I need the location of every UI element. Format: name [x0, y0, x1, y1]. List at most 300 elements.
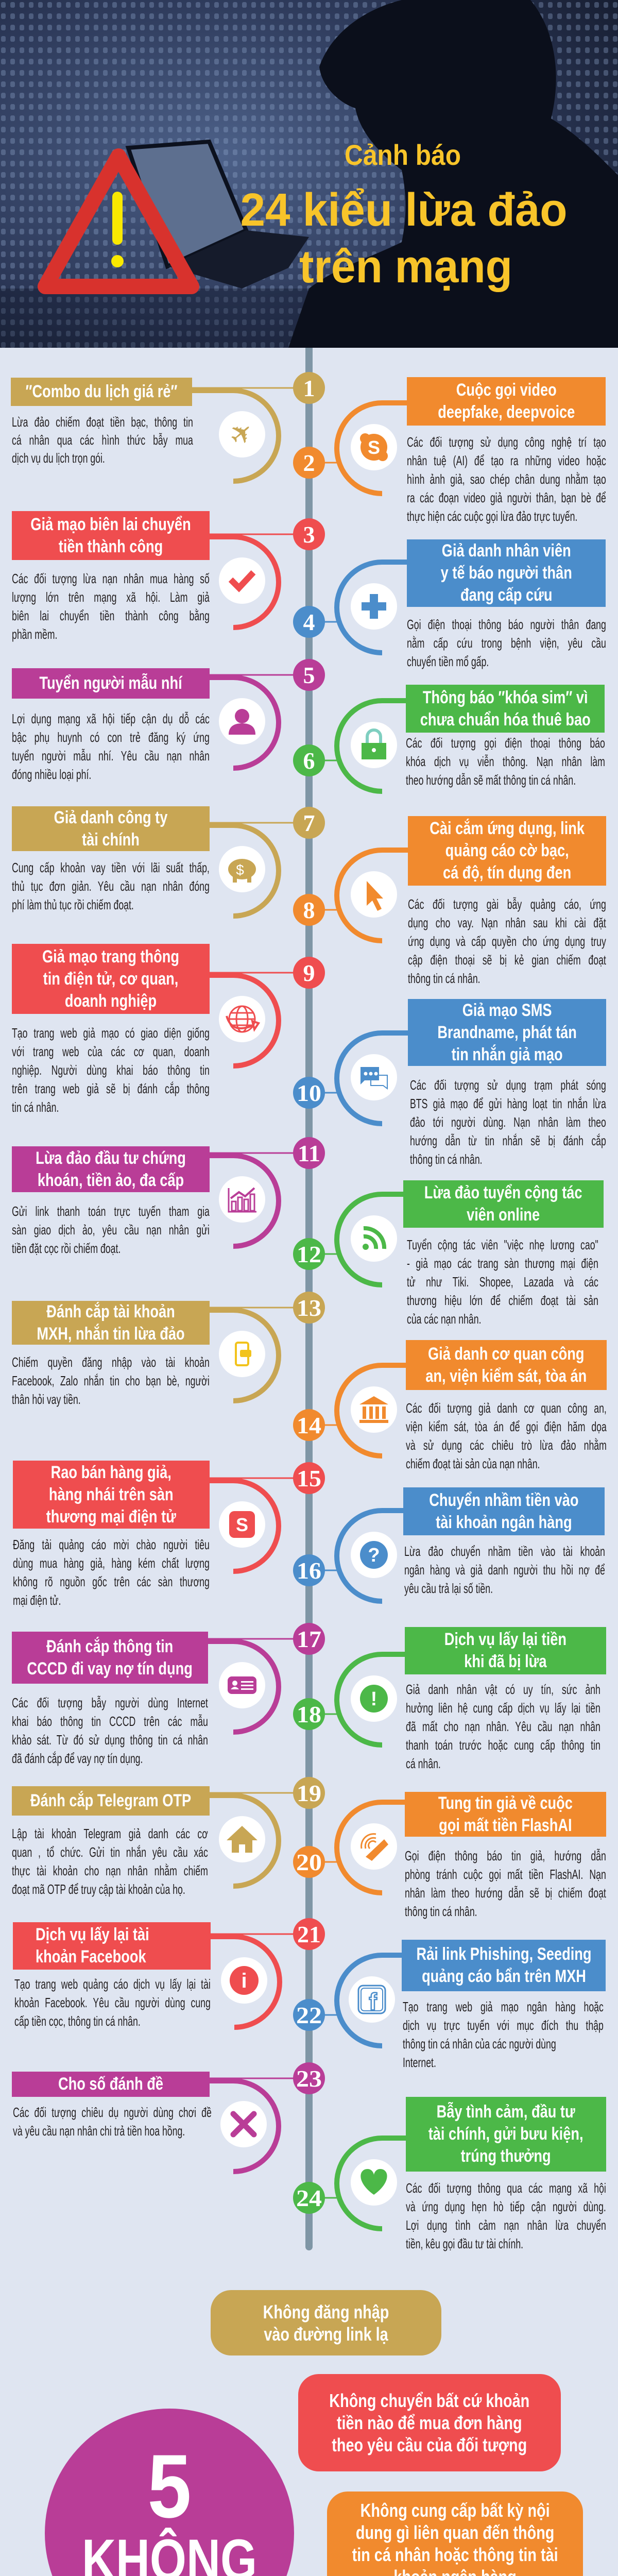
connector, icon and number — [293, 400, 407, 496]
number 14 — [293, 1409, 325, 1441]
title box — [407, 377, 606, 426]
rule 2 — [298, 2374, 561, 2471]
rule 3: tin cá nhân hoặc thông tin tài — [352, 2544, 558, 2565]
title box: Giả danh nhân viên — [442, 541, 571, 561]
title box — [408, 816, 606, 886]
description: đảo tới người dùng. Nạn nhân làm theo — [410, 1114, 606, 1130]
description: Các đối tượng lừa nạn nhân mua hàng số — [12, 571, 210, 586]
header: hacker image with title — [0, 0, 618, 348]
item 12 — [293, 1180, 604, 1327]
title box: doanh nghiệp — [65, 991, 157, 1011]
description — [408, 896, 606, 986]
item 10 — [293, 999, 606, 1167]
description — [407, 617, 606, 669]
description: phòng tránh cuộc gọi mất tiền FlashAI. Nạn — [405, 1867, 606, 1882]
description: Lợi dụng tình cảm nạn nhân lừa chuyển — [406, 2217, 606, 2233]
description — [13, 2103, 212, 2140]
title box: Lừa đảo đầu tư chứng — [36, 1148, 186, 1167]
title box — [405, 1792, 606, 1837]
description: Lập tài khoản Telegram giả danh các cơ — [12, 1826, 208, 1841]
title box: tin điện tử, cơ quan, — [43, 969, 178, 988]
rule 3: Không cung cấp bất kỳ nội — [360, 2500, 550, 2521]
title box: Cuộc gọi video — [456, 380, 556, 400]
title box: an, viện kiểm sát, tòa án — [426, 1366, 587, 1386]
description: trên trang web giả sẽ bị đánh cắp thông — [12, 1081, 210, 1096]
title box: MXH, nhắn tin lừa đảo — [37, 1324, 185, 1344]
icon: wifi — [351, 1215, 397, 1262]
icon: phone — [351, 1823, 397, 1870]
description — [14, 1975, 211, 2030]
description: bậc phụ huynh có con trẻ đăng ký ứng — [12, 730, 210, 745]
rule 1 — [211, 2290, 441, 2355]
title box: Lừa đảo tuyển cộng tác — [424, 1183, 582, 1202]
connector, icon and number — [309, 1792, 618, 1921]
description: Các đối tượng chiêu dụ người dùng chơi đề — [13, 2105, 212, 2120]
description: thông tin cá nhân. — [408, 971, 480, 986]
item 17 — [0, 1632, 309, 1768]
icon: piggy bank: $ — [236, 862, 244, 878]
item 5 — [12, 659, 325, 782]
number 23 — [293, 2062, 325, 2094]
description: yêu cầu trả lại số tiền. — [404, 1581, 493, 1596]
number 19 — [293, 1777, 325, 1809]
title box: đang cấp cứu — [460, 585, 552, 605]
item 20 — [309, 1792, 618, 1921]
number 2 — [293, 447, 325, 479]
connector, icon and number — [293, 1030, 408, 1126]
item 19 — [0, 1786, 309, 1899]
description: Các đối tượng sử dụng công nghệ trí tạo — [407, 434, 606, 450]
item 22 — [309, 1940, 618, 2072]
title box — [12, 1632, 208, 1684]
item 9 — [12, 944, 325, 1115]
item 7 — [12, 806, 325, 919]
description: Các đối tượng thông qua các mạng xã hội — [406, 2180, 606, 2196]
title box: Chuyển nhầm tiền vào — [429, 1490, 579, 1510]
description: Tạo trang web giả mạo ngân hàng hoặc — [403, 1999, 604, 2014]
number 1: 1 — [303, 375, 315, 401]
icon: facebook: f — [369, 1988, 377, 2015]
description — [12, 1693, 208, 1768]
description — [12, 711, 210, 782]
title box: Cho số đánh đề — [58, 2074, 163, 2094]
title box: quảng cáo bẩn trên MXH — [422, 1967, 586, 1986]
description: nằm cấp cứu trong bệnh viện, yêu cầu — [407, 635, 606, 651]
connector, icon and number — [210, 518, 325, 630]
title box: tài chính, gửi bưu kiện, — [428, 2124, 583, 2144]
connector, icon and number — [210, 659, 325, 771]
title box: Dịch vụ lấy lại tài — [36, 1925, 149, 1944]
icon: id card — [219, 1662, 265, 1708]
description — [12, 1824, 208, 1899]
title box — [406, 2097, 606, 2172]
number 7 — [293, 807, 325, 839]
description: đóng nhiều loại phí. — [12, 767, 91, 782]
description: Tuyển cộng tác viên "việc nhẹ lương cao" — [407, 1237, 598, 1252]
item 16 — [309, 1487, 618, 1603]
title box: Cài cắm ứng dụng, link — [430, 819, 585, 838]
description — [407, 434, 606, 524]
title box: Đánh cắp Telegram OTP — [30, 1791, 191, 1810]
rule 2: tiền nào để mua đơn hàng — [337, 2412, 522, 2433]
connector, icon and number — [293, 848, 408, 943]
number 10: 10 — [297, 1080, 321, 1106]
description — [406, 2179, 606, 2253]
title box: trúng thưởng — [461, 2146, 551, 2166]
item 13 — [12, 1292, 325, 1407]
number 9: 9 — [303, 960, 315, 986]
connector, icon and number — [293, 560, 407, 655]
description: quan , tổ chức. Gửi tin nhắn yêu cầu xác — [12, 1844, 208, 1860]
description: Lừa đảo chiếm đoạt tiền bạc, thông tin — [12, 414, 193, 430]
number 7: 7 — [303, 810, 315, 836]
title box: CCCD đi vay nợ tín dụng — [27, 1659, 193, 1679]
description: tiền, kêu gọi đầu tư tài chính. — [406, 2236, 523, 2251]
title box — [12, 944, 210, 1014]
number 3 — [293, 518, 325, 550]
connector, icon and number — [0, 1922, 330, 2030]
number 13 — [293, 1292, 325, 1324]
description: BTS giả mạo để gửi hàng loạt tin nhắn lừa — [410, 1096, 606, 1111]
title box — [13, 1461, 210, 1529]
description: của các nạn nhân. — [407, 1311, 481, 1327]
description: nhân làm theo hướng dẫn sẽ bị chiếm đoạt — [405, 1885, 606, 1901]
connector, icon and number — [210, 1292, 325, 1403]
description: ngân hàng và giả danh người thu hồi nợ để — [404, 1562, 605, 1578]
rule 3 — [327, 2492, 583, 2576]
description: với trang web của các cơ quan, doanh — [12, 1044, 210, 1059]
description: dịch vụ trực tuyến với mục đích thu thập — [403, 2018, 604, 2033]
description: Internet. — [403, 2055, 436, 2070]
title box: quảng cáo cờ bạc, — [445, 841, 569, 860]
title box: y tế báo người thân — [440, 563, 572, 583]
icon: exclamation: ! — [371, 1688, 377, 1710]
number 4: 4 — [303, 609, 315, 635]
number 24 — [293, 2182, 325, 2214]
description: cấp tiền cọc, thông tin cá nhân. — [14, 2013, 141, 2029]
number 17: 17 — [297, 1626, 321, 1652]
description: thương hiệu lớn để chiếm đoạt tài sản — [407, 1293, 598, 1308]
title box: hàng nhái trên sàn — [49, 1485, 174, 1504]
description: không rõ nguồn gốc trên các sàn thương — [13, 1574, 210, 1589]
connector, icon and number — [293, 698, 406, 794]
description: ứng dụng và cấp quyền cho ứng dụng truy — [408, 934, 606, 949]
title box: cá độ, tín dụng đen — [443, 863, 571, 883]
description: thân hỏi vay tiền. — [12, 1392, 81, 1407]
icon: info: i — [241, 1970, 247, 1992]
rule 1: Không đăng nhập — [263, 2301, 389, 2323]
number 4 — [293, 606, 325, 638]
description: hướng dẫn từ tin nhắn sẽ bị đánh cắp — [410, 1133, 606, 1148]
description: hình ảnh giả, sao chép chân dung nhằm tạo — [407, 471, 606, 487]
description: đã đánh cắp để vay nợ tín dụng. — [12, 1751, 143, 1766]
icon: person — [219, 698, 265, 744]
item 15 — [0, 1461, 309, 1610]
description: cá nhân. — [406, 1756, 441, 1771]
description: Tạo trang web giả mạo có giao diện giống — [12, 1025, 210, 1041]
rule 3: dung gì liên quan đến thông — [356, 2522, 554, 2543]
description: mại điện tử. — [13, 1592, 61, 1608]
number 6 — [293, 744, 325, 776]
description: thanh toán trước hoặc cung cấp thông tin — [406, 1737, 600, 1753]
title box: thương mại điện tử — [46, 1506, 176, 1526]
title box: Brandname, phát tán — [437, 1022, 577, 1042]
description: Lợi dụng mạng xã hội tiếp cận dụ dỗ các — [12, 711, 210, 726]
description: Chiếm quyền đăng nhập vào tài khoản — [12, 1354, 210, 1370]
number 24: 24 — [296, 2185, 322, 2211]
title box: Rải link Phishing, Seeding — [416, 1944, 591, 1964]
description — [406, 1399, 607, 1473]
5 Không section — [0, 2287, 618, 2576]
number 12: 12 — [297, 1241, 321, 1267]
title box: tài khoản ngân hàng — [436, 1513, 572, 1532]
title: Cảnh báo — [345, 139, 461, 171]
icon: cross — [220, 2101, 267, 2147]
item 8 — [293, 816, 606, 986]
description: thực tài khoản cho nạn nhân nhằm chiếm — [12, 1863, 208, 1878]
number 15 — [293, 1462, 325, 1494]
description: Tạo trang web quảng cáo dịch vụ lấy lại tài — [14, 1976, 211, 1992]
title box — [403, 1180, 604, 1228]
item 14 — [309, 1340, 618, 1473]
number 16: 16 — [297, 1557, 321, 1584]
title box: khi đã bị lừa — [464, 1652, 547, 1671]
number 20: 20 — [296, 1849, 322, 1875]
description: cập điện thoại sẽ bị kẻ gian chiếm đoạt — [408, 952, 606, 968]
title box: Rao bán hàng giả, — [51, 1462, 171, 1482]
description — [12, 860, 210, 912]
description — [405, 1846, 606, 1921]
number 14: 14 — [297, 1412, 321, 1438]
title: 24 kiểu lừa đảo — [240, 184, 568, 236]
number 6: 6 — [303, 748, 315, 774]
description: cá nhân qua các hình thức bẫy mua — [12, 432, 193, 448]
connector, icon and number — [293, 1192, 403, 1287]
description: thông tin cá nhân của các người dùng — [403, 2036, 556, 2052]
description: thông tin cá nhân. — [410, 1151, 483, 1167]
description: đã mất cho nạn nhân. Yêu cầu nạn nhân — [406, 1719, 600, 1734]
description — [13, 1535, 210, 1609]
title: trên mạng — [299, 241, 512, 293]
description — [406, 735, 605, 788]
icon: heart — [351, 2159, 397, 2206]
title box: Tuyển người mẫu nhí — [39, 673, 182, 693]
description: biên lai chuyển tiền thành công bằng — [12, 608, 210, 623]
description: - giả mạo các trang sàn thương mại điện — [407, 1256, 598, 1271]
description — [12, 1354, 210, 1407]
title box: Giả danh công ty — [54, 808, 167, 827]
item 2 — [293, 377, 606, 524]
description: dịch vụ du lịch trọn gói. — [12, 450, 105, 466]
description — [12, 1025, 210, 1115]
connector, icon and number — [0, 2072, 330, 2175]
title box — [12, 1301, 210, 1345]
rule 2: theo yêu cầu của đối tượng — [332, 2434, 527, 2455]
title box — [12, 668, 210, 699]
title box — [13, 1922, 211, 1970]
description: khai báo thông tin CCCD trên các mẫu — [12, 1714, 208, 1729]
icon: skype — [351, 424, 397, 470]
title box — [405, 1627, 606, 1674]
title box — [408, 999, 606, 1066]
description: và yêu cầu nạn nhân chi trả tiền hoa hồng. — [13, 2123, 185, 2139]
title box — [406, 1340, 607, 1390]
icon: check — [219, 557, 265, 604]
icon: plane: ✈ — [222, 414, 261, 454]
number 11 — [293, 1137, 325, 1169]
number 23: 23 — [296, 2065, 322, 2092]
icon: globe — [219, 996, 265, 1042]
description: Gửi link thanh toán trực tuyến tham gia — [12, 1204, 210, 1219]
icon: house — [219, 1816, 265, 1862]
number 13: 13 — [297, 1295, 321, 1321]
description: tin cá nhân. — [12, 1099, 59, 1115]
icon: skype: S — [368, 437, 380, 458]
number 18: 18 — [297, 1701, 321, 1727]
number 5 — [293, 659, 325, 691]
description — [406, 1680, 600, 1773]
title box: Thông báo ″khóa sim″ vì — [423, 687, 588, 707]
description: dụng cho vay. Nạn nhân sau khi cài đặt — [408, 915, 606, 930]
description: Đăng tải quảng cáo mời chào người tiêu — [13, 1537, 210, 1552]
number 22 — [293, 1999, 325, 2031]
connector, icon and number — [309, 1940, 618, 2072]
item 24 — [309, 2097, 618, 2253]
title box — [12, 1786, 210, 1816]
number 12 — [293, 1238, 325, 1270]
number 11: 11 — [298, 1140, 320, 1166]
number 20 — [293, 1846, 325, 1878]
description — [12, 1204, 210, 1256]
icon: exclamation — [351, 1675, 397, 1722]
number 17 — [293, 1623, 325, 1655]
title box: tài chính — [82, 829, 140, 849]
description — [12, 414, 193, 466]
connector, icon and number — [0, 1786, 330, 1899]
description: thông tin cá nhân. — [405, 1904, 477, 1919]
description: nhân tuệ (AI) để tạo ra những video hoặc — [407, 453, 606, 468]
title box: tiền thành công — [59, 537, 163, 556]
icon: phone message — [219, 1331, 265, 1377]
description: theo hướng dẫn sẽ mất thông tin cá nhân. — [406, 772, 576, 788]
description: Gọi điện thông báo tin giả, hướng dẫn — [405, 1848, 606, 1863]
description: Các đối tượng giả danh cơ quan công an, — [406, 1400, 607, 1416]
title box — [402, 1940, 606, 1991]
title box: Đánh cắp thông tin — [46, 1636, 174, 1656]
description: phí làm thủ tục rồi chiếm đoạt. — [12, 897, 134, 912]
icon: shop: S — [236, 1514, 248, 1535]
item 18 — [309, 1627, 618, 1773]
icon: info — [221, 1957, 267, 2004]
description: Facebook, Zalo nhắn tin cho bạn bè, người — [12, 1373, 210, 1388]
description: và ứng dụng hẹn hò tiếp cận người dùng. — [406, 2199, 606, 2214]
title box: Dịch vụ lấy lại tiền — [444, 1630, 566, 1649]
title box: Giả mạo trang thông — [42, 947, 179, 967]
connector, icon and number — [309, 1487, 618, 1603]
icon: chart — [219, 1176, 265, 1223]
description: Các đối tượng gọi điện thoại thông báo — [406, 735, 605, 751]
warning triangle — [45, 156, 192, 286]
title box: Đánh cắp tài khoản — [46, 1301, 175, 1321]
title box — [406, 685, 605, 733]
title box: tin nhắn giả mạo — [451, 1045, 563, 1064]
title box — [12, 2072, 210, 2097]
icon: question — [351, 1532, 397, 1578]
rule 2: Không chuyển bất cứ khoản — [330, 2390, 529, 2411]
item 4 — [293, 539, 606, 669]
description: hưởng liên hệ cung cấp dịch vụ lấy lại tiền — [406, 1700, 600, 1716]
title box: Giả mạo biên lai chuyển — [30, 514, 191, 534]
number 18 — [293, 1698, 325, 1730]
description: ra các đoạn video giả người thân, bạn bè để — [407, 490, 606, 505]
title box: khoản Facebook — [36, 1947, 146, 1967]
description: viện kiểm sát, tòa án để gọi điện hăm dọa — [406, 1419, 607, 1434]
description — [12, 571, 210, 642]
item 21 — [0, 1922, 309, 2030]
title — [240, 139, 568, 293]
description: dùng mua hàng giả, hàng kém chất lượng — [13, 1555, 210, 1571]
description: Các đối tượng sử dụng trạm phát sóng — [410, 1077, 606, 1093]
number 8 — [293, 894, 325, 926]
number 10 — [293, 1077, 325, 1109]
rule 1: vào đường link lạ — [264, 2324, 388, 2344]
description: khóa dịch vụ viễn thông. Nạn nhân làm — [406, 754, 605, 769]
description: sàn giao dịch ảo, yêu cầu nạn nhân gửi — [12, 1222, 210, 1238]
description: và sử dụng các chiêu trò lừa đảo nhằm — [406, 1437, 607, 1453]
title box — [12, 1146, 210, 1192]
description: tiền đặt cọc rồi chiếm đoạt. — [12, 1241, 121, 1256]
description: nghiệp. Người dùng khai báo thông tin — [12, 1062, 210, 1078]
icon: question: ? — [368, 1545, 380, 1566]
connector, icon and number — [210, 807, 325, 919]
connector, icon and number — [309, 2097, 618, 2253]
number 2: 2 — [303, 450, 315, 476]
title box: viên online — [467, 1205, 540, 1225]
item 6 — [293, 685, 605, 794]
title box: deepfake, deepvoice — [438, 402, 575, 422]
connector, icon and number — [309, 1340, 618, 1473]
title box — [407, 539, 606, 607]
title box — [12, 511, 210, 560]
description: thực hiện các cuộc gọi lừa đảo trực tuyến. — [407, 509, 577, 524]
number 19: 19 — [297, 1780, 321, 1806]
description: Cung cấp khoản vay tiền với lãi suất thấp, — [12, 860, 210, 875]
title box: chưa chuẩn hóa thuê bao — [420, 710, 591, 730]
title box: Giả mạo SMS — [462, 1001, 552, 1020]
icon: shop — [219, 1501, 265, 1548]
number 3: 3 — [303, 521, 315, 548]
description: Gọi điện thoại thông báo người thân đang — [407, 617, 606, 632]
description — [403, 1997, 604, 2072]
description: tuyển người mẫu nhí. Yêu cầu nạn nhân — [12, 748, 210, 764]
connector, icon and number — [210, 957, 325, 1069]
icon: courthouse — [351, 1386, 397, 1433]
number 8: 8 — [303, 897, 315, 923]
title box: khoán, tiền ảo, đa cấp — [38, 1171, 184, 1190]
connector, icon and number — [309, 1627, 618, 1773]
number 16 — [293, 1554, 325, 1586]
description: khoản Facebook. Yêu cầu người dùng cung — [14, 1995, 211, 2010]
title box: gọi mất tiền FlashAI — [439, 1816, 572, 1835]
connector, icon and number — [210, 1137, 325, 1249]
description: tử như Tiki. Shopee, Lazada và các — [407, 1274, 598, 1290]
title box: ″Combo du lịch giá rẻ″ — [25, 382, 178, 401]
description: khảo sát. Từ đó sử dụng thông tin cá nhân — [12, 1732, 208, 1748]
number 5: 5 — [303, 662, 315, 688]
description: Các đối tượng gài bẫy quảng cáo, ứng — [408, 896, 606, 912]
description: đoạt mã OTP để truy cập tài khoản của họ. — [12, 1882, 185, 1897]
number 1 — [293, 372, 325, 404]
